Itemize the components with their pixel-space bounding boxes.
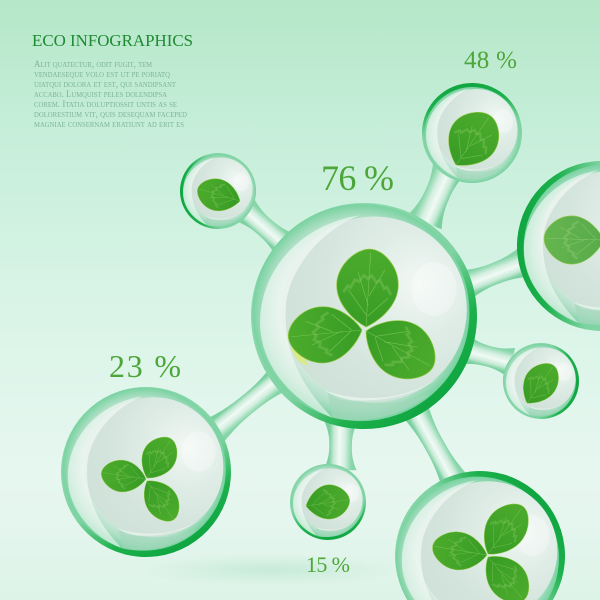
leaf — [435, 101, 509, 178]
leaf — [514, 356, 566, 412]
clover — [430, 494, 539, 600]
body text: corem. Itatia doluptiossit untis as se — [34, 100, 177, 110]
body text: dolorestium vit, quis desequam faceped — [34, 110, 187, 120]
title: ECO INFOGRAPHICS — [32, 31, 193, 50]
body text: vendaeseque volo est ut pe poriatq — [34, 70, 170, 80]
bubble: top small, 48% — [414, 75, 530, 191]
leaf — [193, 174, 244, 216]
leaf — [303, 481, 352, 523]
body text: Alit quatectur, odit fugit, tem — [34, 60, 153, 70]
body text: magniae consernam eratiunt ad erit es — [34, 120, 184, 130]
soft ground shadow — [140, 554, 400, 586]
leaf — [544, 216, 600, 264]
bubble: bottom small — [284, 458, 372, 546]
clover — [99, 430, 187, 528]
label: 76 percent: 76 % — [321, 158, 394, 198]
connecting tubes — [206, 158, 530, 489]
bubble: bottom right with clover — [360, 436, 600, 600]
body text: accabo. Lumquist peles dolendipsa — [34, 90, 167, 100]
body text — [34, 60, 187, 130]
bubble: right edge — [510, 154, 600, 338]
bubble: 23% with clover — [30, 356, 262, 588]
bubble: right small — [497, 337, 585, 425]
label: 23 percent: 23 % — [109, 348, 181, 384]
bubble: main 76% with clover — [204, 156, 524, 476]
bubble: upper left small — [174, 147, 262, 235]
body text: uiatqui dolora et est, qui sandipsant — [34, 80, 177, 90]
label: 48 percent: 48 % — [464, 47, 517, 74]
clover — [285, 248, 447, 391]
label: 15 percent: 15 % — [306, 552, 350, 577]
